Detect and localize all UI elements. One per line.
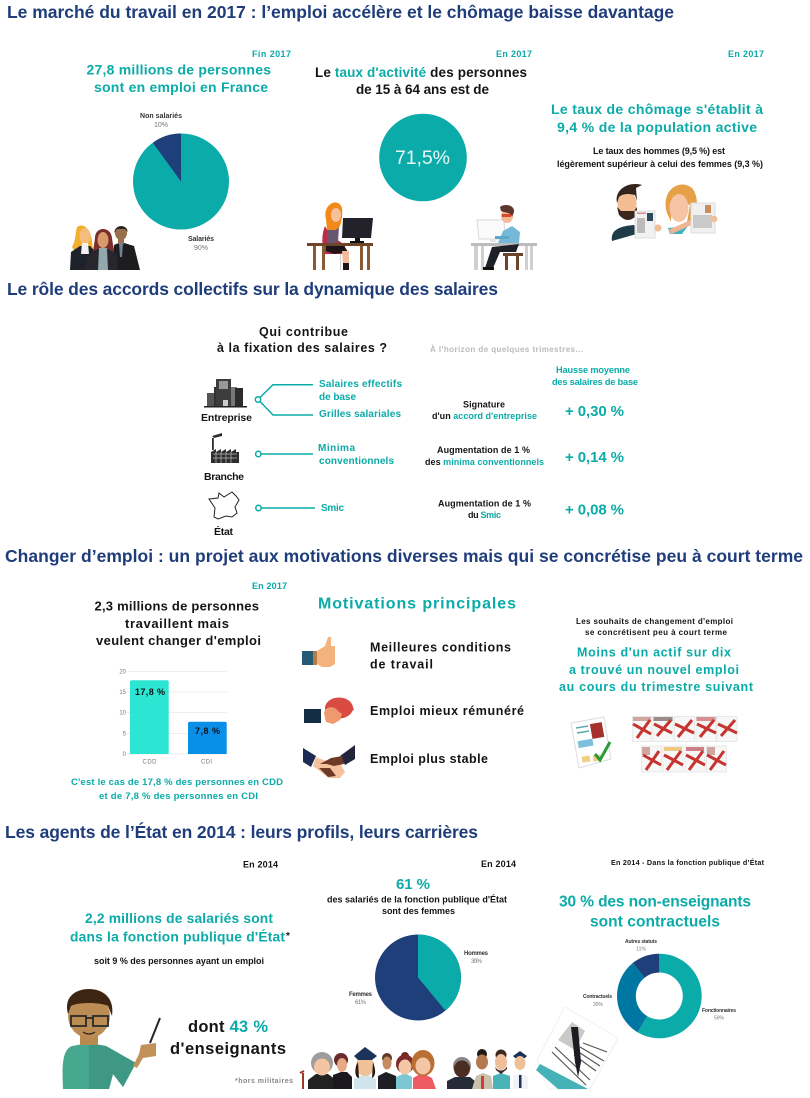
- row: Smic: du Smic: [468, 510, 501, 520]
- intro text: Les souhaits de changement d'emploi: [576, 617, 733, 626]
- panel title: [559, 894, 751, 930]
- panel title: 9,4 % de la population active: [557, 119, 757, 135]
- icon: teacher with pointer: [63, 989, 160, 1089]
- heading: marché du travail: Le marché du travail en 2017 : l’emploi accélère et le chômage baisse davantage: [7, 2, 674, 22]
- key message: a trouvé un nouvel emploi: [569, 663, 739, 677]
- icon: three office workers: [70, 225, 140, 270]
- panel question title: [217, 325, 387, 355]
- icon: woman at desk: [307, 202, 373, 270]
- pie chart: salariés: Non salariés: [140, 113, 182, 120]
- value: branche: + 0,14 %: [565, 449, 624, 466]
- heading: agents de l'État: Les agents de l’État en 2014 : leurs profils, leurs carrières: [5, 821, 478, 842]
- key message: [559, 646, 754, 694]
- value circle 71,5 %: [379, 114, 467, 201]
- panel: motivations principales: [302, 596, 524, 778]
- row: Smic: Augmentation de 1 %: [438, 498, 531, 508]
- panel: fonction publique d'État: [63, 860, 293, 1089]
- icon: crowd of state employees: [300, 1047, 528, 1089]
- panel: veulent changer d'emploi: [71, 581, 287, 802]
- panel subtitle: des salariés de la fonction publique d'État: [327, 894, 507, 904]
- donut chart: statuts: [583, 939, 736, 1038]
- icon: rejected CVs: [632, 716, 737, 772]
- panel title: sont en emploi en France: [94, 79, 268, 95]
- label: salaires: Grilles salariales: [319, 409, 401, 420]
- icon: handshake: [303, 745, 355, 778]
- row: accord d'entreprise: [432, 400, 537, 421]
- panel: taux d'activité: [307, 49, 537, 270]
- panel: taux de chômage: [551, 49, 764, 241]
- intro text: [576, 617, 733, 637]
- panel: fixation des salaires: [201, 325, 638, 538]
- label: salaires: de base: [319, 392, 356, 403]
- donut chart: statuts: Autres statuts: [625, 939, 657, 945]
- pie chart: salariés: Salariés: [188, 236, 214, 243]
- bar chart: [119, 670, 227, 766]
- panel title: veulent changer d'emploi: [96, 633, 261, 648]
- icon: thumb up: [302, 637, 335, 667]
- date label: En 2017: [728, 49, 764, 59]
- bar chart: 15: [119, 690, 127, 696]
- panel title: [315, 65, 527, 97]
- donut chart: statuts: Fonctionnaires: [702, 1008, 736, 1014]
- label: salaires: [319, 379, 402, 420]
- bar chart: 10: [119, 710, 127, 716]
- bar chart: 5: [123, 732, 127, 738]
- column heading: des salaires de base: [552, 377, 638, 387]
- pie chart: femmes/hommes: 61%: [355, 1000, 367, 1006]
- pie chart: femmes/hommes: 39%: [471, 959, 483, 965]
- icon: accepted CV: [571, 717, 611, 768]
- panel title: [94, 598, 261, 648]
- heading: accords collectifs: Le rôle des accords collectifs sur la dynamique des salaires: [7, 279, 498, 299]
- panel title: 27,8 millions de personnes: [86, 62, 271, 78]
- panel title: Le taux de chômage s'établit à: [551, 101, 763, 117]
- icon: piggy bank in hand: [304, 698, 354, 724]
- bar chart: 0: [123, 752, 127, 758]
- connector: Entreprise: [255, 385, 313, 415]
- callout: enseignants: dont 43 %: [188, 1018, 268, 1036]
- date label: En 2014: [481, 859, 516, 869]
- callout: enseignants: d'enseignants: [170, 1040, 286, 1058]
- panel title: 2,3 millions de personnes: [94, 598, 259, 614]
- donut chart: statuts: Contractuels: [583, 994, 612, 1000]
- panel title: [551, 101, 763, 135]
- panel title: de 15 à 64 ans est de: [356, 82, 489, 97]
- icon: man at desk: [471, 205, 537, 270]
- icon: France map: [209, 492, 239, 519]
- donut chart: statuts: 11%: [636, 946, 647, 952]
- label: conditions: [370, 640, 511, 672]
- connector: Branche: [256, 451, 313, 457]
- pie chart: femmes/hommes: Hommes: [464, 951, 489, 957]
- value: État: + 0,08 %: [565, 502, 624, 518]
- pie chart: femmes/hommes: Femmes: [349, 992, 373, 998]
- donut chart: statuts: 30%: [593, 1002, 604, 1008]
- subtitle: soit 9 % des personnes ayant un emploi: [94, 956, 264, 966]
- label: Smic: Smic: [321, 503, 344, 514]
- row: minima: des minima conventionnels: [425, 457, 544, 467]
- label: conditions: de travail: [370, 658, 433, 672]
- panel: emploi en France: [70, 49, 291, 270]
- panel question title: Qui contribue: [259, 325, 348, 339]
- panel note: Le taux des hommes (9,5 %) est: [593, 146, 725, 156]
- bar chart: CDD: [142, 760, 157, 766]
- chart caption: C'est le cas de 17,8 % des personnes en CDD: [71, 777, 283, 788]
- label: rémunéré: Emploi mieux rémunéré: [370, 704, 524, 718]
- label: stable: Emploi plus stable: [370, 752, 488, 766]
- panel title: 2,2 millions de salariés sont: [85, 911, 273, 926]
- chart caption: et de 7,8 % des personnes en CDI: [99, 791, 258, 802]
- pie chart: femmes/hommes: [349, 934, 489, 1020]
- icon: two job seekers with CVs: [612, 184, 717, 241]
- column heading: [552, 365, 638, 387]
- connector: État: [256, 505, 315, 511]
- bar chart: 17,8 %: [135, 687, 165, 697]
- row: Smic: [438, 498, 531, 520]
- panel title: sont contractuels: [590, 914, 720, 930]
- key message: Moins d'un actif sur dix: [577, 646, 731, 660]
- date label: En 2017: [496, 49, 532, 59]
- panel subtitle: [327, 894, 507, 916]
- key figure: 61 %: [396, 876, 430, 893]
- horizon note: À l'horizon de quelques trimestres...: [430, 345, 583, 354]
- key message: au cours du trimestre suivant: [559, 680, 754, 694]
- pie chart: salariés: [133, 113, 229, 252]
- bar chart: 7,8 %: [195, 726, 220, 736]
- row: accord d'entreprise: d'un accord d'entreprise: [432, 411, 537, 421]
- row: minima: [425, 445, 544, 467]
- pie chart: salariés: 10%: [154, 122, 168, 129]
- date label: En 2017: [252, 581, 287, 591]
- footnote: *hors militaires: [235, 1078, 293, 1085]
- panel title: dans la fonction publique d'État: [70, 928, 285, 944]
- label: État: État: [214, 525, 234, 538]
- value: entreprise: + 0,30 %: [565, 403, 624, 420]
- pie chart: salariés: 90%: [194, 245, 208, 252]
- panel title: travaillent mais: [125, 616, 229, 631]
- panel title: [86, 62, 271, 95]
- panel note: [557, 146, 763, 169]
- donut chart: statuts: 59%: [714, 1016, 725, 1022]
- panel title: 30 % des non-enseignants: [559, 894, 751, 910]
- label: minima: Minima: [318, 443, 355, 454]
- date label: En 2014: [243, 860, 278, 870]
- asterisk: *: [286, 931, 290, 942]
- row: accord d'entreprise: Signature: [463, 400, 505, 410]
- value circle 71,5 %: 71,5%: [395, 147, 450, 169]
- bar chart: CDI: [201, 760, 212, 766]
- panel title: Le taux d'activité des personnes: [315, 65, 527, 80]
- row: minima: Augmentation de 1 %: [437, 445, 530, 455]
- icon: document and pen: [536, 1007, 618, 1089]
- icon: factory: [211, 433, 239, 463]
- panel title: Motivations principales: [318, 596, 516, 612]
- intro text: se concrétisent peu à court terme: [585, 628, 728, 637]
- column heading: Hausse moyenne: [556, 365, 630, 375]
- bar chart: 20: [119, 670, 127, 676]
- panel: souhaits de changement: [559, 617, 754, 772]
- label: Entreprise: Entreprise: [201, 412, 252, 424]
- chart caption: [71, 777, 283, 802]
- label: conditions: Meilleures conditions: [370, 640, 511, 654]
- panel question title: à la fixation des salaires ?: [217, 341, 387, 355]
- panel subtitle: sont des femmes: [382, 906, 455, 916]
- panel: 61 % de femmes: [300, 859, 528, 1089]
- label: minima: [318, 443, 394, 467]
- label: minima: conventionnels: [319, 456, 394, 467]
- label: salaires: Salaires effectifs: [319, 379, 402, 390]
- date label: En 2014 - Dans la fonction publique d’État: [611, 858, 765, 867]
- panel title: [70, 911, 285, 944]
- label: Branche: Branche: [204, 471, 244, 483]
- icon: buildings: [204, 379, 247, 408]
- date label: Fin 2017: [252, 49, 291, 59]
- panel: non-enseignants: [536, 858, 765, 1089]
- panel note: légèrement supérieur à celui des femmes (9,3 %): [557, 159, 763, 169]
- heading: changer d'emploi: Changer d’emploi : un projet aux motivations diverses mais qui se concrétise peu à court terme: [5, 546, 803, 566]
- callout: enseignants: [170, 1018, 286, 1058]
